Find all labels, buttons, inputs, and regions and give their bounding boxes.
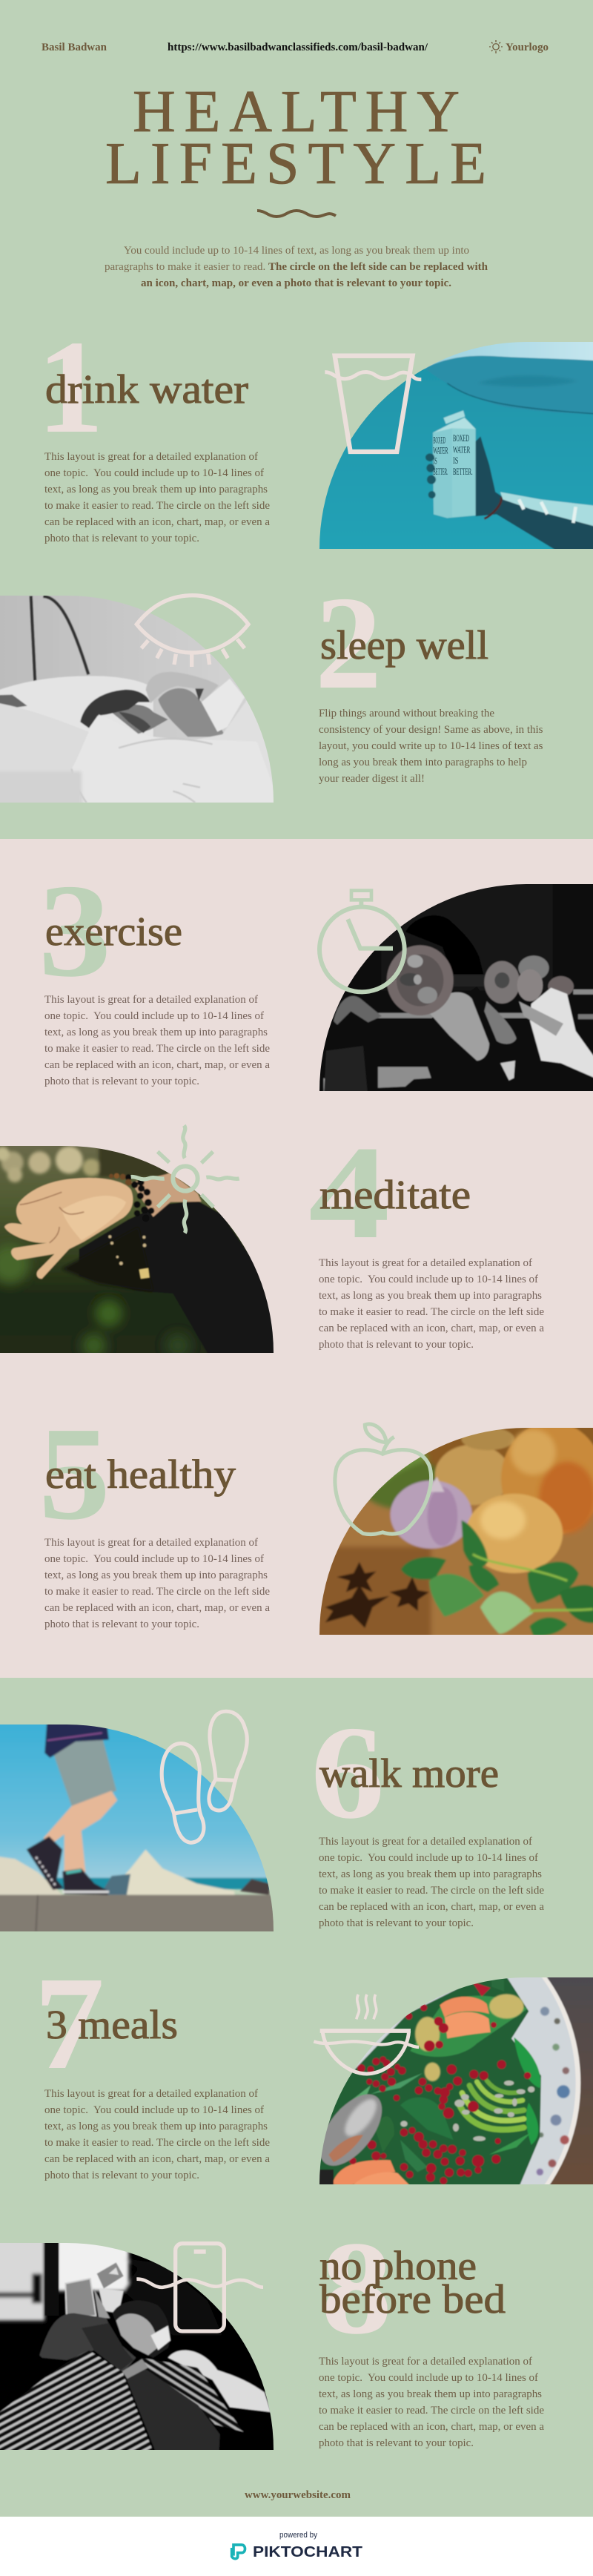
photo: underwater carton: WATER [433, 446, 448, 456]
body text [44, 451, 271, 544]
icon: apple [335, 1424, 431, 1535]
body text: long as you break them into paragraphs to help [319, 757, 527, 768]
photo: underwater carton: BOXED [453, 433, 469, 444]
panel: no phone before bed [0, 2241, 544, 2450]
intro text: paragraphs to make it easier to read. The circle on the left side can be replaced with [105, 261, 488, 273]
panel: drink water [44, 342, 593, 549]
body text: text, as long as you break them up into paragraphs [44, 484, 268, 495]
body text: one topic. You could include up to 10-14 lines of [319, 1274, 538, 1285]
body text: This layout is great for a detailed explanation of [44, 2088, 258, 2100]
number 5: 5 [39, 1400, 110, 1547]
body text: This layout is great for a detailed explanation of [44, 994, 258, 1006]
body text: can be replaced with an icon, chart, map, or even a [319, 1322, 545, 1334]
body text: your reader digest it all! [319, 773, 425, 785]
panel: exercise [44, 884, 593, 1091]
icon: steaming bowl [314, 1994, 419, 2074]
body text: This layout is great for a detailed explanation of [319, 2356, 532, 2368]
heading: before bed [319, 2276, 506, 2322]
body text: one topic. You could include up to 10-14 lines of [44, 467, 264, 479]
body text [319, 708, 543, 785]
body text: can be replaced with an icon, chart, map, or even a [44, 2153, 271, 2165]
body text: can be replaced with an icon, chart, map, or even a [44, 1602, 271, 1614]
piktochart wordmark: PIKTOCHART [253, 2544, 362, 2560]
photo: underwater carton: BOXED [433, 435, 445, 445]
body text: one topic. You could include up to 10-14 lines of [44, 1553, 264, 1565]
panel: eat healthy [44, 1422, 593, 1635]
body text: photo that is relevant to your topic. [44, 1075, 199, 1087]
body text: to make it easier to read. The circle on the left side [319, 1306, 544, 1318]
body text: This layout is great for a detailed explanation of [319, 1257, 532, 1269]
photo: vegetables [319, 1428, 593, 1635]
body text [319, 1836, 545, 1929]
panel: sleep well [0, 593, 543, 803]
body text: This layout is great for a detailed explanation of [319, 1836, 532, 1848]
heading: sleep well [320, 622, 488, 668]
number 4: 4 [308, 1119, 390, 1266]
body text: consistency of your design! Same as above, in this [319, 724, 543, 736]
photo: underwater carton: BETTER. [433, 467, 448, 477]
number 2: 2 [315, 569, 382, 717]
body text: photo that is relevant to your topic. [44, 533, 199, 544]
panel: meditate [0, 1119, 545, 1362]
body text: can be replaced with an icon, chart, map, or even a [44, 516, 271, 528]
heading: eat healthy [45, 1452, 236, 1497]
photo: underwater carton [319, 342, 593, 549]
background: white footer [0, 2517, 593, 2576]
heading: 3 meals [46, 2002, 178, 2047]
author name: Basil Badwan [42, 42, 107, 53]
body text: to make it easier to read. The circle on the left side [319, 1885, 544, 1897]
heading: exercise [45, 909, 182, 954]
icon: stopwatch [319, 891, 405, 992]
body text: can be replaced with an icon, chart, map, or even a [319, 2421, 545, 2433]
photo: underwater carton: BETTER. [453, 467, 473, 477]
heading: walk more [319, 1750, 499, 1796]
icon: sun logo [489, 40, 503, 53]
body text: can be replaced with an icon, chart, map, or even a [44, 1059, 271, 1071]
body text: text, as long as you break them up into paragraphs [319, 1868, 542, 1880]
body text: This layout is great for a detailed explanation of [44, 451, 258, 463]
icon: glass of water [325, 356, 421, 452]
body text: can be replaced with an icon, chart, map, or even a [319, 1901, 545, 1913]
title: LIFESTYLE [105, 131, 486, 197]
body text: to make it easier to read. The circle on the left side [44, 1586, 270, 1598]
icon: piktochart logo [232, 2545, 245, 2559]
body text: layout, you could write up to 10-14 lines of text as [319, 740, 543, 752]
body text: Flip things around without breaking the [319, 708, 494, 719]
body text: text, as long as you break them up into paragraphs [319, 1290, 542, 1302]
body text: one topic. You could include up to 10-14 lines of [319, 1852, 538, 1864]
background: green top section [0, 0, 593, 839]
icon: footprints [162, 1711, 247, 1842]
intro text: You could include up to 10-14 lines of text, as long as you break them up into [124, 245, 469, 257]
url: https://www.basilbadwanclassifieds.com/basil-badwan/ [168, 42, 428, 53]
heading: drink water [45, 366, 248, 412]
intro text [105, 245, 488, 289]
number 3: 3 [39, 857, 111, 1004]
photo: underwater carton: IS [453, 455, 458, 466]
body text: text, as long as you break them up into paragraphs [44, 1027, 268, 1038]
body text: photo that is relevant to your topic. [44, 2170, 199, 2181]
body text: to make it easier to read. The circle on the left side [319, 2405, 544, 2417]
panel: 3 meals [42, 1977, 593, 2184]
wave divider [257, 211, 336, 217]
body text: one topic. You could include up to 10-14 lines of [319, 2372, 538, 2384]
panel: walk more [0, 1699, 545, 1944]
background: green lower section [0, 1678, 593, 2517]
body text: text, as long as you break them up into paragraphs [44, 1569, 268, 1581]
heading: no phone [319, 2243, 477, 2288]
number 7: 7 [34, 1949, 105, 2097]
body text: one topic. You could include up to 10-14 lines of [44, 2104, 264, 2116]
body text [319, 2356, 545, 2449]
body text [319, 1257, 545, 1351]
body text [44, 2088, 271, 2181]
body text: photo that is relevant to your topic. [319, 2437, 474, 2449]
website address: www.yourwebsite.com [245, 2489, 351, 2501]
body text: photo that is relevant to your topic. [319, 1339, 474, 1351]
body text: to make it easier to read. The circle on the left side [44, 500, 270, 512]
heading: meditate [319, 1172, 471, 1217]
intro text: an icon, chart, map, or even a photo that is relevant to your topic. [141, 277, 451, 289]
background: pink middle section [0, 839, 593, 1678]
body text: to make it easier to read. The circle on the left side [44, 2137, 270, 2149]
photo: meditating hand [0, 1146, 274, 1353]
body text: text, as long as you break them up into paragraphs [44, 2121, 268, 2132]
body text: text, as long as you break them up into paragraphs [319, 2388, 542, 2400]
body text: photo that is relevant to your topic. [319, 1917, 474, 1929]
photo: woman on phone [0, 2243, 274, 2450]
photo: underwater carton: WATER [453, 445, 471, 455]
heading [319, 2243, 506, 2322]
body text: one topic. You could include up to 10-14 lines of [44, 1010, 264, 1022]
footer: powered by piktochart [232, 2531, 362, 2560]
photo: woman sleeping [0, 596, 274, 803]
photo: salad plate [319, 1977, 593, 2184]
photo: barbell class [319, 884, 593, 1091]
body text [44, 994, 271, 1087]
photo: walking legs [0, 1725, 274, 1931]
body text: photo that is relevant to your topic. [44, 1618, 199, 1630]
powered by: powered by [279, 2531, 317, 2540]
body text: to make it easier to read. The circle on the left side [44, 1043, 270, 1055]
body text [44, 1537, 271, 1630]
number 1: 1 [37, 313, 104, 461]
icon: phone [136, 2244, 263, 2331]
icon: closed eye [136, 596, 248, 667]
logo label: Yourlogo [506, 42, 549, 53]
icon: sun [131, 1125, 239, 1233]
number 6: 6 [311, 1699, 385, 1846]
number 8: 8 [321, 2214, 392, 2362]
header bar [42, 42, 549, 53]
body text: This layout is great for a detailed explanation of [44, 1537, 258, 1549]
title [105, 79, 486, 197]
title: HEALTHY [133, 79, 460, 145]
photo: underwater carton: IS [433, 456, 437, 467]
